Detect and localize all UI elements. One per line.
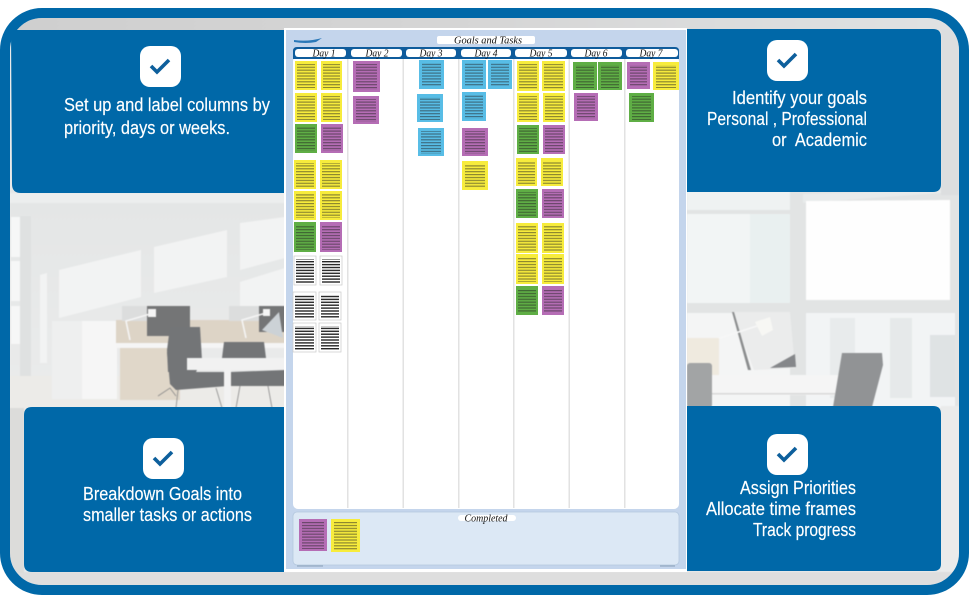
panel: set up columns <box>11 30 284 193</box>
white counter <box>82 321 117 399</box>
board title: Goals and Tasks <box>454 34 522 46</box>
header: day 6 <box>571 48 622 60</box>
day header band <box>293 47 679 60</box>
header: day 7: Day 7 <box>639 48 663 60</box>
floor and strips <box>942 406 954 408</box>
planner board <box>284 28 687 572</box>
text: assign priorities: Assign Priorities <box>740 478 856 498</box>
right windows <box>686 190 959 410</box>
text: set up columns: Set up and label columns by <box>64 95 270 115</box>
notes: day 3 <box>417 60 444 156</box>
left window <box>11 217 20 344</box>
panel: assign priorities <box>686 406 941 571</box>
header: day 2: Day 2 <box>365 48 389 60</box>
column board <box>293 56 679 509</box>
notes: day 5 <box>516 61 565 315</box>
notes: day 1 <box>293 61 343 352</box>
header: day 1 <box>295 48 346 60</box>
header: day 3: Day 3 <box>419 48 442 60</box>
desk <box>116 343 286 348</box>
icon: check bottom left <box>143 438 184 479</box>
notes: day 6 <box>573 62 622 121</box>
completed panel <box>293 512 679 565</box>
text: assign priorities: Allocate time frames <box>706 499 856 519</box>
text: identify goals: Identify your goals <box>732 88 867 108</box>
chairs right <box>833 353 883 407</box>
header: day 5 <box>515 48 567 60</box>
chairs <box>167 327 285 390</box>
text: breakdown goals: Breakdown Goals into <box>83 484 242 504</box>
desk right <box>712 375 838 393</box>
beige partitions <box>116 320 286 345</box>
floor left <box>20 376 31 386</box>
notes: day 2 <box>353 61 380 124</box>
notes: day 7 <box>627 62 679 122</box>
text: identify goals: or Academic <box>772 130 867 150</box>
panel: identify goals <box>686 29 941 192</box>
footer marks <box>297 566 675 567</box>
lamps <box>126 313 266 340</box>
text: breakdown goals: smaller tasks or actions <box>83 505 252 525</box>
wall light patches <box>40 217 285 363</box>
header: day 7 <box>626 48 678 60</box>
text: assign priorities: Track progress <box>753 520 856 540</box>
header: day 4: Day 4 <box>474 48 498 60</box>
notes: day 4 <box>462 60 512 190</box>
text: identify goals: Personal , Professional <box>707 109 867 129</box>
completed note: yellow <box>331 519 360 552</box>
lamp <box>736 326 756 334</box>
header: day 2 <box>351 48 402 60</box>
header: day 5: Day 5 <box>529 48 552 60</box>
header: day 6: Day 6 <box>584 48 608 60</box>
header: day 4 <box>461 48 511 60</box>
text: set up columns: priority, days or weeks. <box>64 118 230 138</box>
header: day 1: Day 1 <box>312 48 336 60</box>
header: day 3 <box>406 48 456 60</box>
table <box>186 357 203 371</box>
completed note: purple <box>299 519 327 551</box>
monitor <box>736 314 793 369</box>
logo <box>294 38 322 43</box>
completed label: Completed <box>464 514 508 524</box>
icon: check top left <box>140 46 181 87</box>
icon: check bottom right <box>767 434 808 475</box>
icon: check top right <box>767 40 808 81</box>
panel: breakdown goals <box>24 407 284 572</box>
monitors <box>122 306 285 336</box>
